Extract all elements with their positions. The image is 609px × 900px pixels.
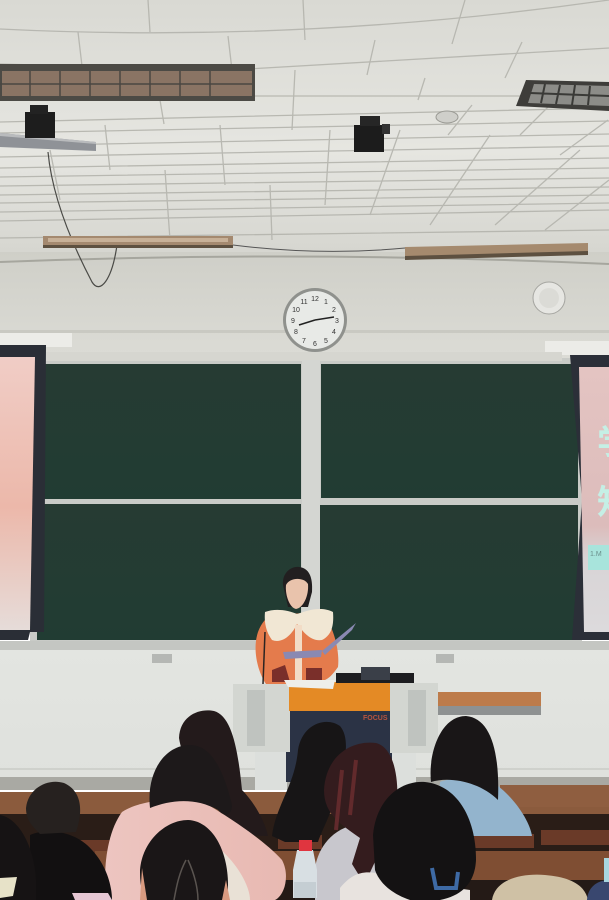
speaker (256, 567, 356, 684)
blackboard panel top right (321, 364, 578, 498)
podium wood top (289, 682, 390, 711)
fluorescent lamp right (405, 243, 588, 260)
wall clock: 6 (313, 341, 317, 348)
back desks row (0, 785, 609, 864)
blackboard panel bottom left (37, 504, 301, 640)
hanging cable (48, 152, 117, 287)
ceiling (0, 0, 609, 252)
podium right panel (390, 683, 438, 753)
wall socket left (152, 654, 172, 663)
student front right long hair (340, 782, 476, 900)
coat on chair (492, 875, 588, 900)
screen highlight bar: 1.M (590, 551, 602, 558)
wall clock: 7 (302, 338, 306, 345)
speaker mount centre (354, 116, 390, 152)
chair backs (80, 830, 609, 854)
podium right speaker mesh (408, 690, 426, 746)
lower wall (0, 641, 609, 790)
wall clock: 3 (335, 318, 339, 325)
wall clock: 10 (292, 307, 300, 314)
student ponytail centre (140, 820, 230, 900)
paper on podium (284, 680, 335, 689)
water bottle (293, 840, 317, 898)
student front left black top (26, 782, 112, 900)
student corner blue (587, 880, 609, 900)
student pink hoodie (105, 745, 286, 900)
side table (437, 692, 541, 715)
student far left (0, 815, 36, 900)
projector screen housing left (0, 333, 72, 347)
speaker face (286, 579, 308, 609)
corner bottle (604, 858, 609, 882)
wall clock: 1 (324, 299, 328, 306)
student denim jacket right (431, 716, 532, 836)
podium brand: FOCUS (363, 715, 388, 722)
projector mount left (0, 105, 96, 151)
screen highlight bar (588, 545, 609, 570)
blackboard frame (30, 352, 582, 650)
speaker hair (283, 567, 312, 607)
speaker blouse placket (295, 625, 302, 680)
projector screen housing right (545, 341, 609, 355)
podium left speaker mesh (247, 690, 265, 746)
podium (233, 667, 438, 790)
wall clock: 4 (332, 329, 336, 336)
speaker torso (256, 612, 338, 684)
wall clock: 5 (324, 338, 328, 345)
ceiling fire sensor (436, 111, 458, 123)
wall clock: 9 (291, 318, 295, 325)
ceiling light right (516, 80, 609, 111)
microphone stalk (263, 632, 265, 684)
front desk (0, 851, 609, 900)
wall clock (283, 288, 347, 352)
blackboard panel bottom right (320, 505, 578, 640)
blackboard central post (302, 360, 320, 642)
upper wall (0, 252, 609, 362)
projection screen left (0, 345, 46, 640)
speaker collar (265, 609, 333, 641)
wall clock: 11 (300, 299, 308, 306)
fluorescent lamp left (43, 236, 233, 248)
ceiling light left (0, 64, 255, 101)
wall clock: 12 (311, 296, 319, 303)
document held (283, 623, 356, 659)
podium left panel (233, 684, 290, 752)
wall clock: 8 (294, 329, 298, 336)
blackboard panel top left (37, 364, 301, 499)
round wall speaker (533, 282, 565, 314)
student black hair centre (272, 722, 346, 842)
speaker hem pattern (272, 665, 322, 682)
wall socket right (436, 654, 454, 663)
cable between lamps (233, 245, 405, 251)
student auburn hair (315, 743, 397, 900)
wall clock: 2 (332, 307, 336, 314)
student standing hair back (179, 710, 268, 836)
projection screen right (570, 355, 609, 640)
device on podium (361, 667, 390, 680)
student hand and pen (72, 893, 112, 900)
laptop keyboard device (336, 673, 414, 683)
